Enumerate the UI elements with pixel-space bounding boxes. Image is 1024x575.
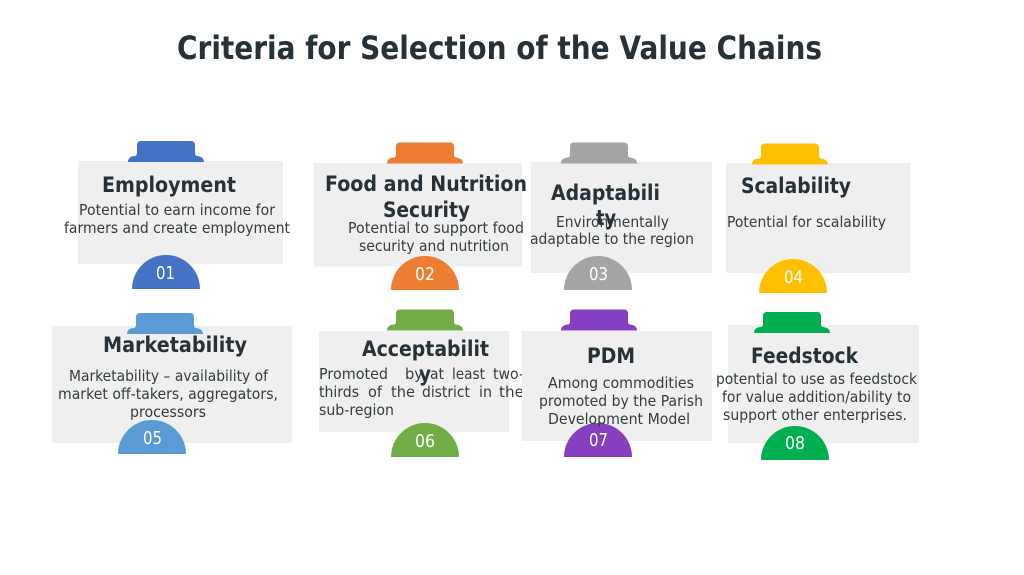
description: adaptable to the region [530,230,694,248]
icon: purple semicircle [564,423,632,457]
icon: orange tab [387,142,463,164]
title: Criteria for Selection of the Value Chains [177,29,822,67]
description: market off-takers, aggregators, [58,385,278,403]
description: support other enterprises. [723,406,907,424]
heading [362,337,489,387]
description: Environmentally [556,213,669,231]
icon: purple tab [561,310,637,330]
icon: yellow semicircle [759,259,827,293]
heading: Feedstock [751,344,859,369]
panel: 06 Acceptability [319,310,524,457]
panel: 04 Scalability [726,144,910,293]
description: in [479,383,492,401]
description: least [452,365,485,383]
description: at [430,365,444,383]
icon: orange semicircle [391,256,459,290]
heading: PDM [587,344,635,369]
description [539,374,703,428]
heading: y [419,362,431,387]
icon: green tab [387,310,463,330]
description: the [499,383,524,401]
icon: dark green tab [754,312,830,333]
description: sub-region [319,401,394,419]
description: Development Model [548,410,690,428]
panel: 07 PDM [522,310,712,457]
number: 03 [589,264,608,285]
description: processors [130,403,206,421]
number: 02 [415,264,435,285]
icon: dark green semicircle [761,426,829,460]
number: 06 [415,431,435,452]
icon: green semicircle [391,423,459,457]
icon: gray semicircle [564,256,632,290]
description: potential to use as feedstock [716,370,917,388]
panel: 03 Adaptability [530,142,712,290]
description: the [391,383,415,401]
description: of [368,383,383,401]
heading: Acceptabilit [362,337,489,362]
icon: blue semicircle [132,255,200,289]
description: promoted by the Parish [539,392,703,410]
panel: 05 Marketability [52,313,292,454]
description [64,201,290,237]
heading: Employment [102,173,236,198]
description: two- [493,365,524,383]
description: thirds [319,383,359,401]
number: 08 [785,433,805,454]
panel: 08 Feedstock [716,312,919,460]
number: 01 [156,263,175,284]
description: security and nutrition [359,237,509,255]
description [530,213,694,248]
heading: Marketability [103,333,247,358]
heading: Adaptabili [551,181,660,206]
description: Promoted [319,365,388,383]
description [716,370,917,424]
icon: light blue semicircle [118,420,186,454]
panel: 02 Food and Nutrition Security [314,142,527,290]
number: 05 [143,428,162,449]
description: farmers and create employment [64,219,290,237]
heading [551,181,660,231]
heading: Security [383,198,470,223]
description: district [422,383,470,401]
description: Marketability – availability of [69,367,269,385]
icon: yellow tab [752,144,828,164]
number: 07 [589,430,608,451]
description: for value addition/ability to [722,388,911,406]
heading: ty [596,206,616,231]
description: by [405,365,423,383]
heading: Scalability [741,174,851,199]
icon: gray tab [561,142,637,164]
description: Among commodities [548,374,694,392]
description [319,365,524,419]
number: 04 [784,267,803,288]
heading [325,172,527,223]
icon: light blue tab [127,313,203,334]
description [58,367,278,421]
description: Potential to earn income for [79,201,276,219]
description [348,219,524,255]
description: Potential for scalability [727,213,886,231]
icon: blue tab [128,141,204,162]
panel: 01 Employment [64,141,290,289]
heading: Food and Nutrition [325,172,527,197]
description: Potential to support food [348,219,524,237]
